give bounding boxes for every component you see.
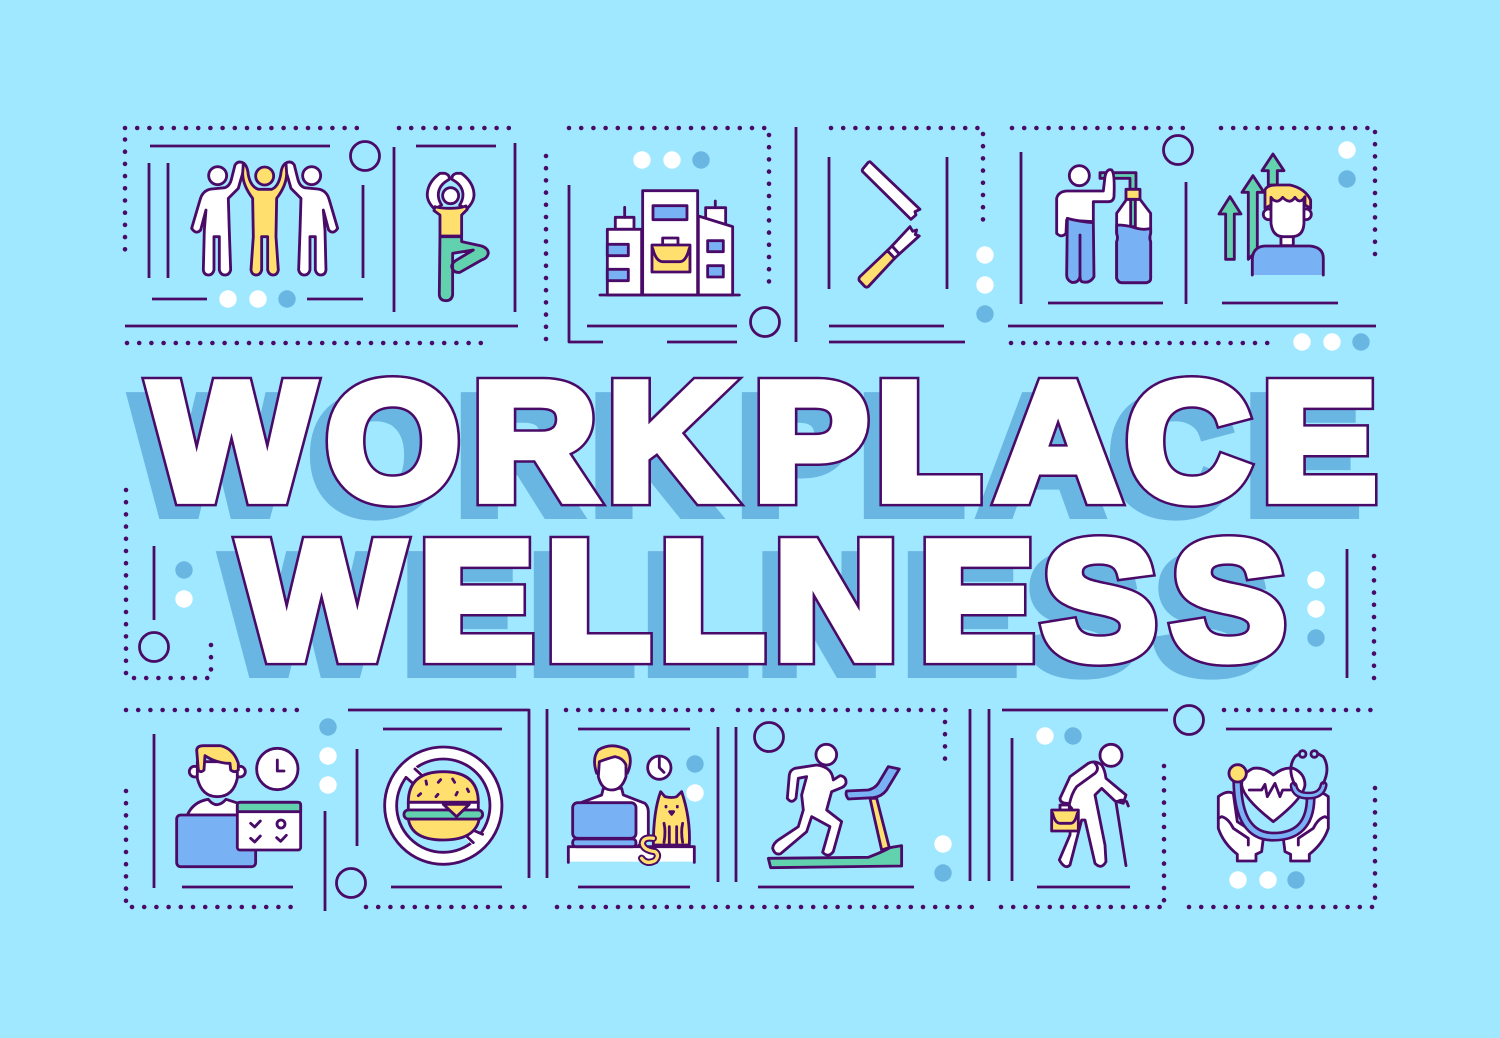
title: Workplace Wellness: WELLNESS [241,507,1286,693]
icon: remote worker with laptop and cat [568,746,694,862]
title: Workplace Wellness [133,348,1377,707]
dot trio: top right row [1293,333,1370,351]
icon: office buildings with briefcase [600,191,739,295]
dot trio: bottom left [319,718,337,794]
dot pair: career growth panel [1338,141,1356,188]
dot trio: cigarette panel [976,246,994,323]
dot pair: treadmill panel [934,835,952,882]
dot trio: top left panel [219,290,296,308]
icon: yoga tree pose [427,173,488,301]
icon: person with laptop, clock and schedule [177,746,301,867]
icon: team high five [192,162,338,275]
icon: hands holding heart with stethoscope [1218,751,1328,861]
title: Workplace Wellness: WORKPLACE [150,348,1377,534]
dot pair: older worker panel [1036,727,1082,745]
icon: runner on treadmill [768,744,902,868]
dot pair: middle left [175,561,193,608]
dot trio: heart care panel [1229,871,1305,889]
icon: broken cigarette [859,162,920,287]
dot pair: remote work panel [686,755,704,802]
icon: older worker with cane and briefcase [1052,744,1128,867]
dot trio: building panel [633,151,710,169]
icon: career growth person with arrows [1219,154,1323,275]
dot trio: middle right [1307,571,1325,647]
icon: man drinking bottled water [1057,166,1151,283]
icon: no burger [385,747,502,864]
